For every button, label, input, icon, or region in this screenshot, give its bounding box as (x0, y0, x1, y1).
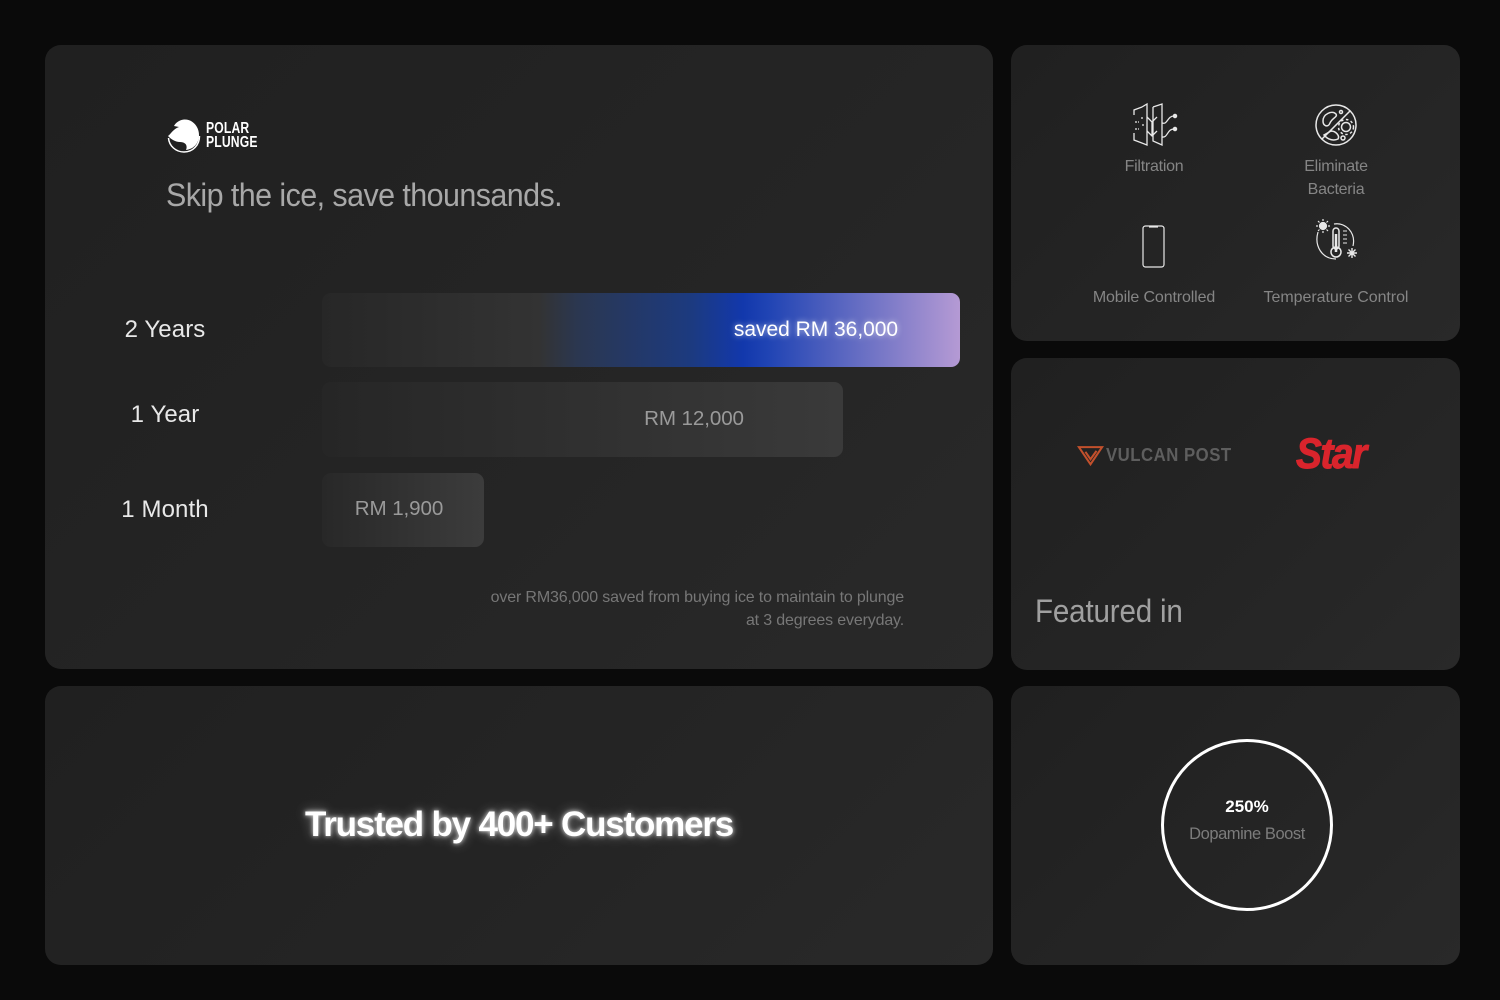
caption: Eliminate Bacteria (1304, 158, 1368, 198)
caption: Mobile Controlled: Mobile Controlled (1093, 289, 1215, 306)
logo wordmark (206, 120, 258, 150)
value: saved RM 36,000: saved RM 36,000 (734, 318, 898, 341)
panel: savings comparison (45, 45, 993, 669)
footnote (491, 589, 904, 629)
heading: Skip the ice, save thounsands. (166, 177, 562, 213)
panel: dopamine boost (1011, 686, 1460, 965)
caption: Eliminate Bacteria: Eliminate (1304, 158, 1368, 175)
heading: Featured in (1035, 593, 1183, 629)
label: 2 Years: 2 Years (125, 316, 205, 343)
bar: 2 Years (322, 293, 960, 367)
value: RM 1,900: RM 1,900 (355, 497, 443, 520)
logo: Polar Plunge (168, 120, 258, 153)
icon: thermometer with sun and snow (1316, 219, 1357, 260)
headline: Trusted by 400+ Customers (305, 805, 733, 844)
icon: bacteria crossed out (1315, 104, 1357, 146)
feature: Temperature Control (1264, 219, 1408, 306)
feature: Eliminate Bacteria (1304, 104, 1368, 198)
panel: features (1011, 45, 1460, 341)
label: 1 Year: 1 Year (131, 401, 199, 428)
ring with stat (1161, 739, 1333, 911)
feature: Mobile Controlled (1093, 225, 1215, 306)
icon: Vulcan Post chevron (1077, 446, 1104, 466)
panel: trusted by (45, 686, 993, 965)
logo: Vulcan Post (1077, 444, 1232, 466)
bar: 1 Month (322, 473, 484, 547)
footnote: over RM36,000 saved from buying ice to maintain to plunge (491, 589, 904, 606)
panel: featured in (1011, 358, 1460, 670)
logo: Star: Star (1296, 430, 1366, 478)
bar: 1 Year (322, 382, 843, 457)
icon: phone (1142, 225, 1165, 268)
caption: Dopamine Boost: Dopamine Boost (1189, 825, 1305, 843)
logo wordmark: POLAR (206, 120, 249, 137)
stat: 250%: 250% (1225, 797, 1269, 816)
icon: polar bear badge (168, 120, 200, 153)
caption: Eliminate Bacteria: Bacteria (1308, 181, 1364, 198)
label: 1 Month: 1 Month (121, 496, 209, 523)
logo wordmark: VULCAN POST (1106, 444, 1232, 465)
footnote: at 3 degrees everyday. (746, 612, 904, 629)
icon: filter (1133, 102, 1178, 146)
value: RM 12,000: RM 12,000 (644, 407, 744, 430)
logo wordmark: PLUNGE (206, 134, 258, 150)
caption: Temperature Control: Temperature Control (1264, 289, 1408, 306)
bar chart (121, 293, 960, 547)
feature: Filtration (1125, 102, 1183, 175)
caption: Filtration: Filtration (1125, 158, 1183, 175)
